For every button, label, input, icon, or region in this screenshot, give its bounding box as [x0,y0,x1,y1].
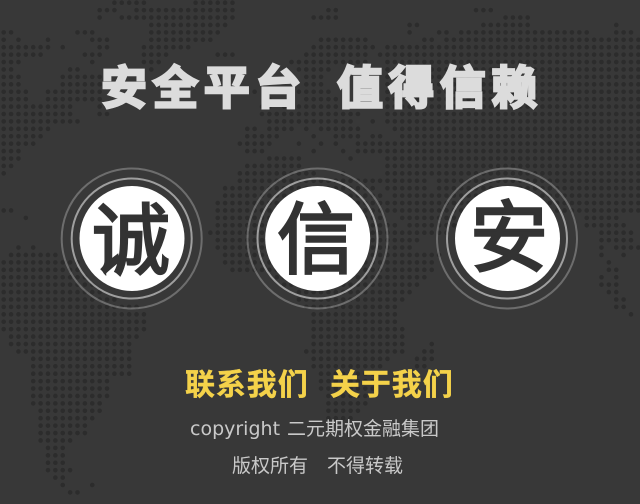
badge: 诚: 诚 [92,197,170,285]
link: contact us: 联系我们 [185,369,309,402]
title: right phrase: 值得信赖 [337,62,543,114]
rights notice left: 版权所有 [232,456,308,477]
title: left phrase: 安全平台 [101,62,307,114]
rights notice right: 不得转载 [327,456,403,477]
text: 二元期权金融集团 [287,419,439,440]
badge: 安: 安 [470,194,548,282]
badge: 信: 信 [277,196,355,284]
copyright line [190,418,439,440]
link: about us: 关于我们 [330,369,454,402]
copyright line: copyright [190,418,280,440]
